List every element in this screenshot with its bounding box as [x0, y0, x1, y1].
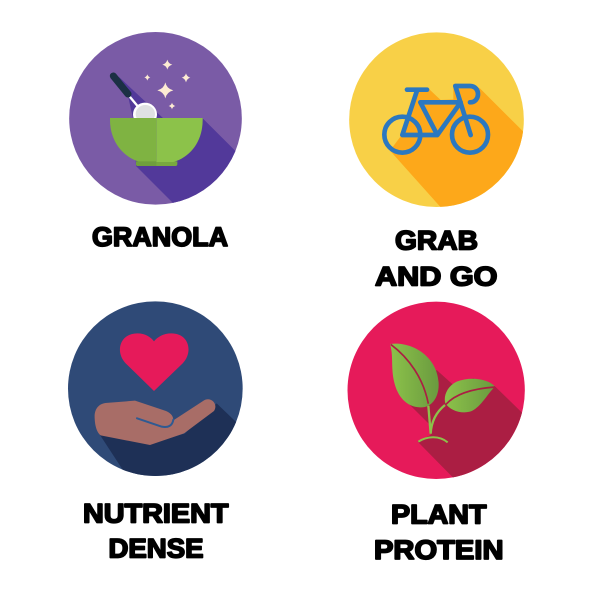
long shadow	[390, 84, 523, 207]
icon: heart	[120, 333, 189, 391]
long shadow	[410, 370, 522, 478]
navy circle	[68, 301, 243, 476]
yellow circle	[349, 32, 524, 207]
heading: grab and go: AND GO	[375, 261, 498, 291]
heading: nutrient dense	[83, 498, 228, 563]
icon: bicycle	[384, 86, 488, 153]
heading: nutrient dense: NUTRIENT	[83, 498, 228, 528]
icon: bowl	[110, 118, 203, 166]
icon: plant	[390, 344, 495, 442]
panel: nutrient dense icon	[68, 301, 243, 476]
long shadow	[119, 77, 236, 203]
icon: spoon	[113, 76, 157, 126]
panel: grab and go icon	[349, 32, 524, 207]
long shadow	[100, 404, 236, 476]
heading: plant protein: PROTEIN	[374, 535, 504, 565]
heading: plant protein: PLANT	[391, 499, 486, 529]
heading: grab and go	[375, 225, 498, 291]
panel: granola icon	[69, 32, 242, 205]
pink circle	[347, 302, 525, 479]
panel: plant protein icon	[348, 302, 525, 479]
icon: sparkles	[144, 60, 190, 109]
heading: nutrient dense: DENSE	[108, 533, 204, 563]
heading: plant protein	[374, 499, 504, 565]
purple circle	[69, 32, 242, 205]
icon: open hand	[95, 399, 215, 445]
heading: grab and go: GRAB	[395, 225, 478, 255]
heading: granola: GRANOLA	[92, 222, 228, 252]
